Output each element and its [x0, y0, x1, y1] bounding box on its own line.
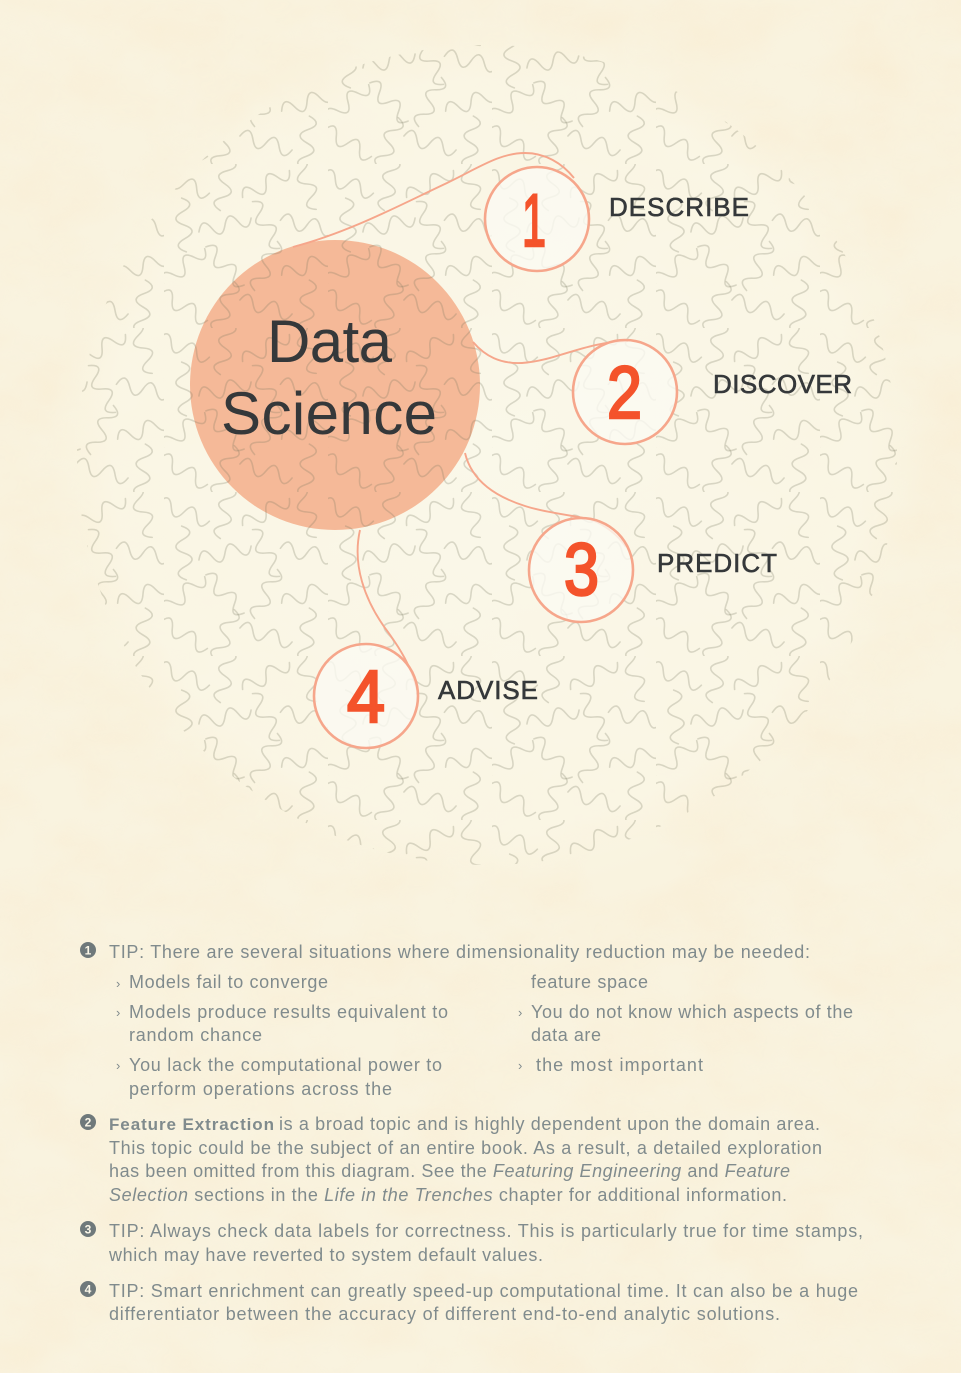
step 1: describe: [485, 167, 749, 271]
tip 1: feature space: [531, 972, 648, 992]
step 1: describe: 1: [522, 179, 546, 262]
tip 1: ›: [116, 1058, 120, 1073]
step 4: advise: [314, 644, 538, 748]
central circle title: [221, 308, 437, 447]
tip 4: 4: [85, 1282, 92, 1296]
tip 1: You lack the computational power to: [129, 1055, 442, 1075]
tip 1: Models fail to converge: [129, 972, 328, 992]
step 2: discover: 2: [607, 351, 642, 434]
tip 3: 3: [85, 1222, 92, 1236]
tip 4: differentiator between the accuracy of different end-to-end analytic solutions.: [109, 1304, 780, 1324]
tip 1: ›: [518, 1005, 522, 1020]
textured squiggle disc: [47, 15, 927, 895]
tip 1: [80, 942, 853, 1099]
step 2: discover: [573, 340, 852, 444]
tip 2: is a broad topic and is highly dependent upon the domain area.: [279, 1114, 820, 1134]
tip 2: [80, 1114, 822, 1205]
tip 1: 1: [85, 944, 92, 958]
step 4: advise: ADVISE: [438, 675, 538, 705]
tip 1: ›: [116, 976, 120, 991]
tip 3: TIP: Always check data labels for correctness. This is particularly true for time stamps,: [109, 1221, 863, 1241]
central circle title: Data: [267, 308, 393, 375]
tip 1: data are: [531, 1025, 601, 1045]
tip 2: Feature Extraction: [109, 1115, 274, 1134]
step 2: discover: DISCOVER: [713, 369, 852, 399]
tip 1: perform operations across the: [129, 1079, 392, 1099]
step 4: advise: 4: [347, 655, 385, 738]
tip 4: [80, 1281, 858, 1324]
step 1: describe: DESCRIBE: [609, 192, 749, 222]
tip 1: the most important: [536, 1055, 703, 1075]
tip 1: ›: [518, 1058, 522, 1073]
tip 2: 2: [85, 1116, 92, 1130]
step 3: predict: PREDICT: [657, 548, 777, 578]
tip 3: which may have reverted to system default values.: [108, 1245, 543, 1265]
tip 1: ›: [116, 1005, 120, 1020]
tip 1: You do not know which aspects of the: [531, 1002, 853, 1022]
tip 3: [80, 1221, 863, 1265]
tip 4: TIP: Smart enrichment can greatly speed-up computational time. It can also be a huge: [109, 1281, 858, 1301]
central circle title: Science: [221, 380, 437, 447]
connector lines: [293, 153, 628, 690]
tip 1: Models produce results equivalent to: [129, 1002, 448, 1022]
tip 2: This topic could be the subject of an entire book. As a result, a detailed exploration: [109, 1138, 822, 1158]
tip 1: random chance: [129, 1025, 262, 1045]
step 3: predict: [529, 518, 777, 622]
step 3: predict: 3: [564, 528, 599, 611]
tip 1: TIP: There are several situations where dimensionality reduction may be needed:: [109, 942, 810, 962]
tip 2: has been omitted from this diagram. See the Featuring Engineering and Feature: [109, 1161, 790, 1181]
tip 2: Selection sections in the Life in the Trenches chapter for additional information.: [109, 1185, 787, 1205]
